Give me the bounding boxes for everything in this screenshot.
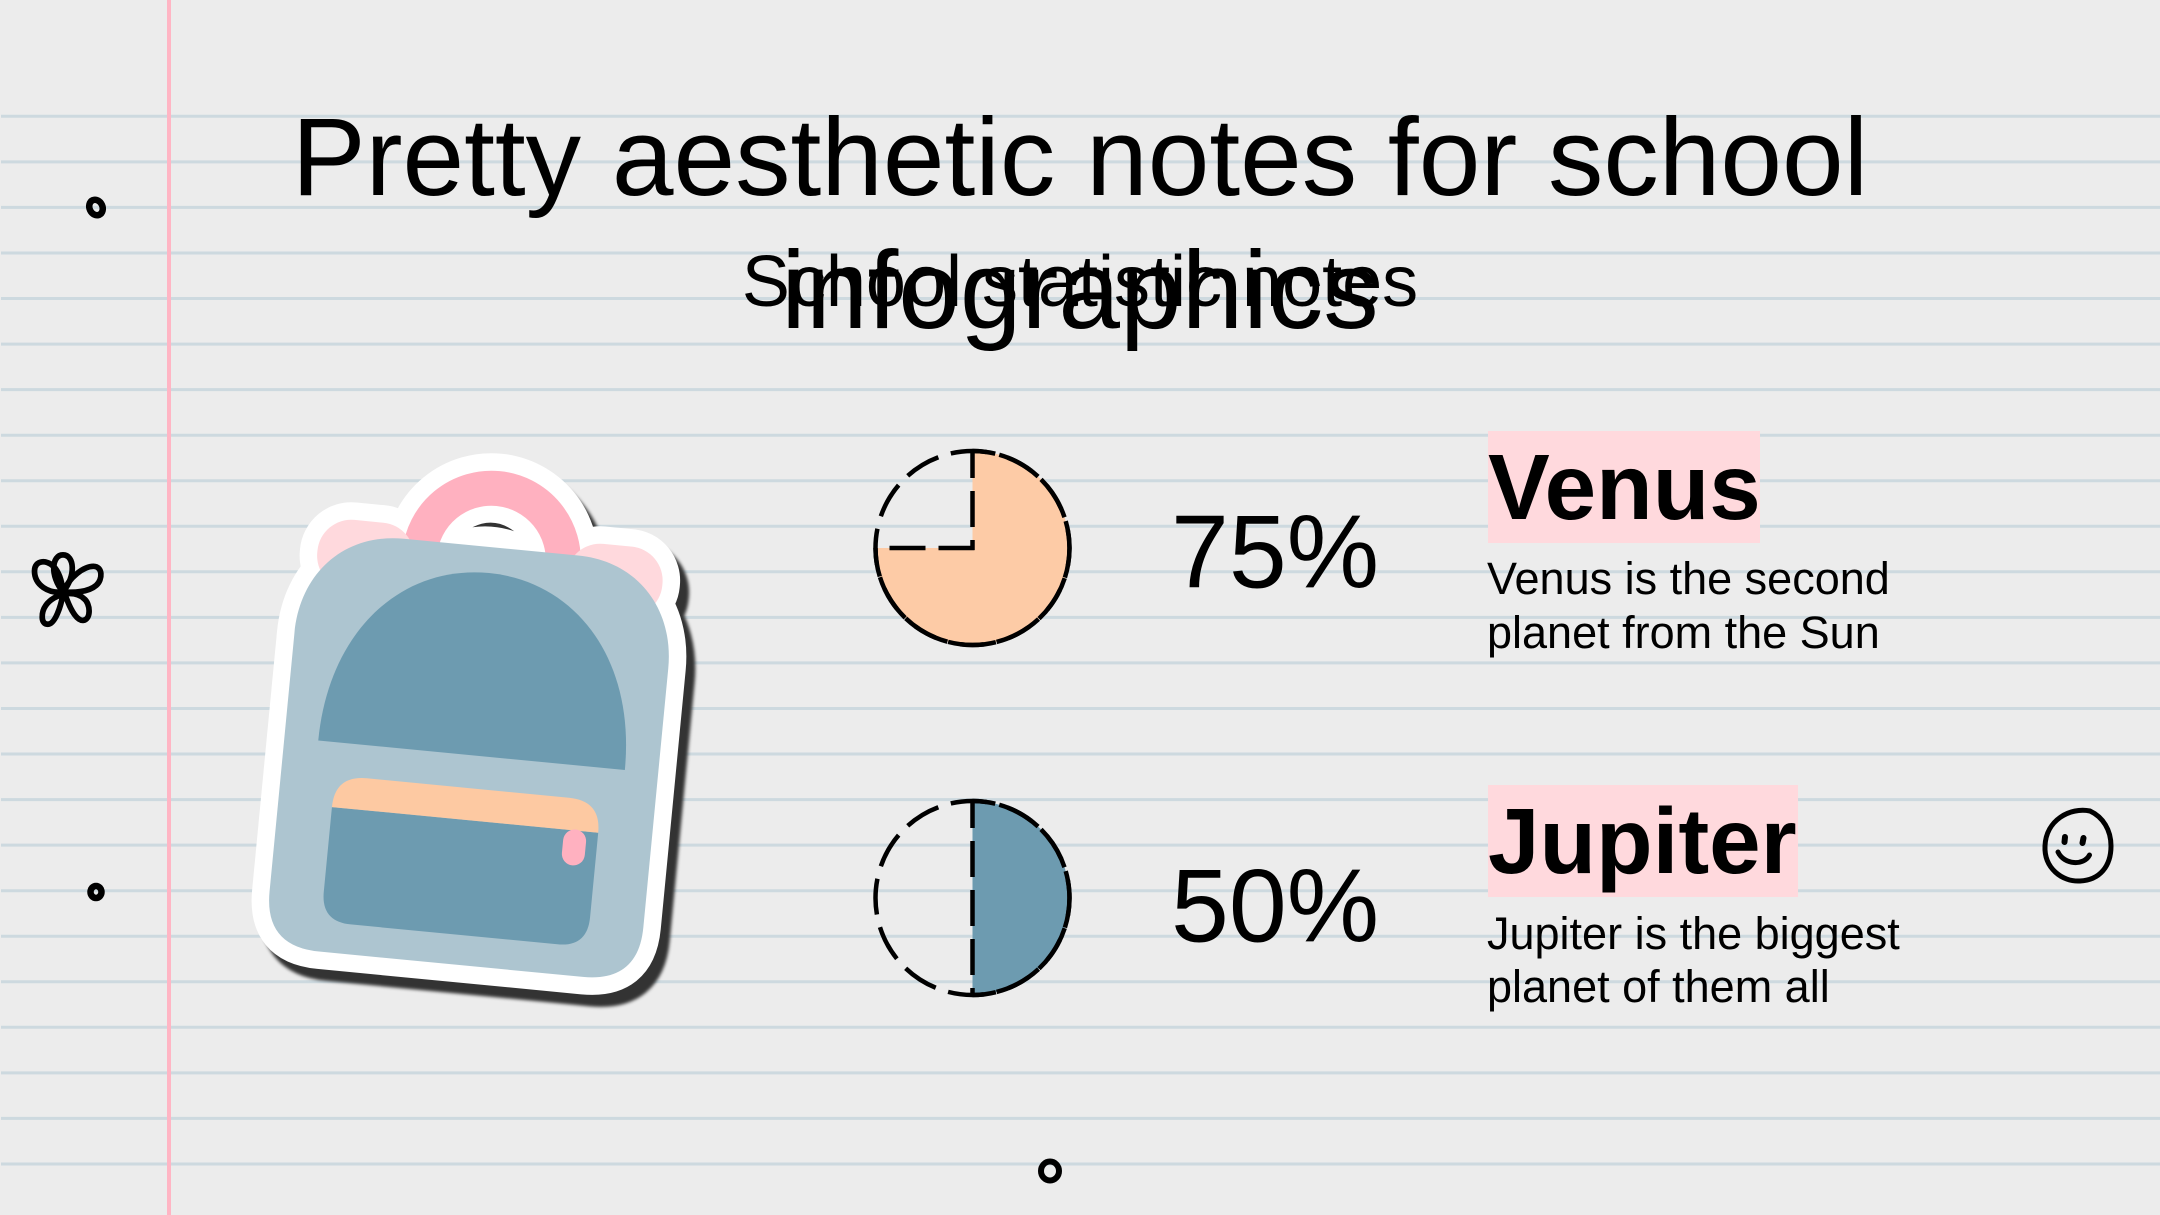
description: Jupiter — [1487, 908, 1900, 1012]
icon: doodle smiley — [2045, 810, 2111, 881]
description: Jupiter: planet of them all — [1487, 961, 1830, 1012]
backpack body — [264, 529, 678, 982]
subtitle: School statistic notes — [742, 242, 1418, 322]
backpack artwork — [264, 470, 684, 982]
description: Venus: planet from the Sun — [1487, 607, 1880, 658]
description: Venus: Venus is the second — [1487, 553, 1890, 604]
percentage: 50%: 50% — [1171, 848, 1379, 964]
icon: doodle ring bottom — [1041, 1162, 1059, 1180]
highlighted heading: Venus: Venus — [1488, 435, 1761, 539]
icon: backpack sticker — [264, 453, 686, 982]
icon: doodle ring middle — [90, 886, 102, 898]
icon: doodle ring top — [87, 198, 105, 217]
backpack handle — [413, 482, 570, 639]
backpack hole shadow — [472, 521, 515, 531]
chart: 50 percent pie — [876, 801, 1070, 995]
backpack zipper pull — [561, 828, 587, 866]
title: Pretty aesthetic notes for school — [292, 96, 1868, 219]
icon: doodle flower — [34, 555, 101, 624]
backpack zipper — [332, 775, 601, 833]
description: Jupiter: Jupiter is the biggest — [1487, 908, 1900, 959]
backpack pocket — [321, 807, 598, 947]
chart: 75 percent pie — [876, 451, 1070, 645]
title: infographics — [781, 229, 1379, 352]
description: Venus — [1487, 553, 1890, 658]
title — [292, 96, 1868, 352]
percentage: 75%: 75% — [1171, 494, 1379, 610]
backpack side pads — [314, 517, 666, 620]
highlighted heading: Jupiter: Jupiter — [1488, 789, 1797, 893]
sticker white outline — [264, 453, 686, 982]
backpack front flap — [318, 558, 642, 770]
